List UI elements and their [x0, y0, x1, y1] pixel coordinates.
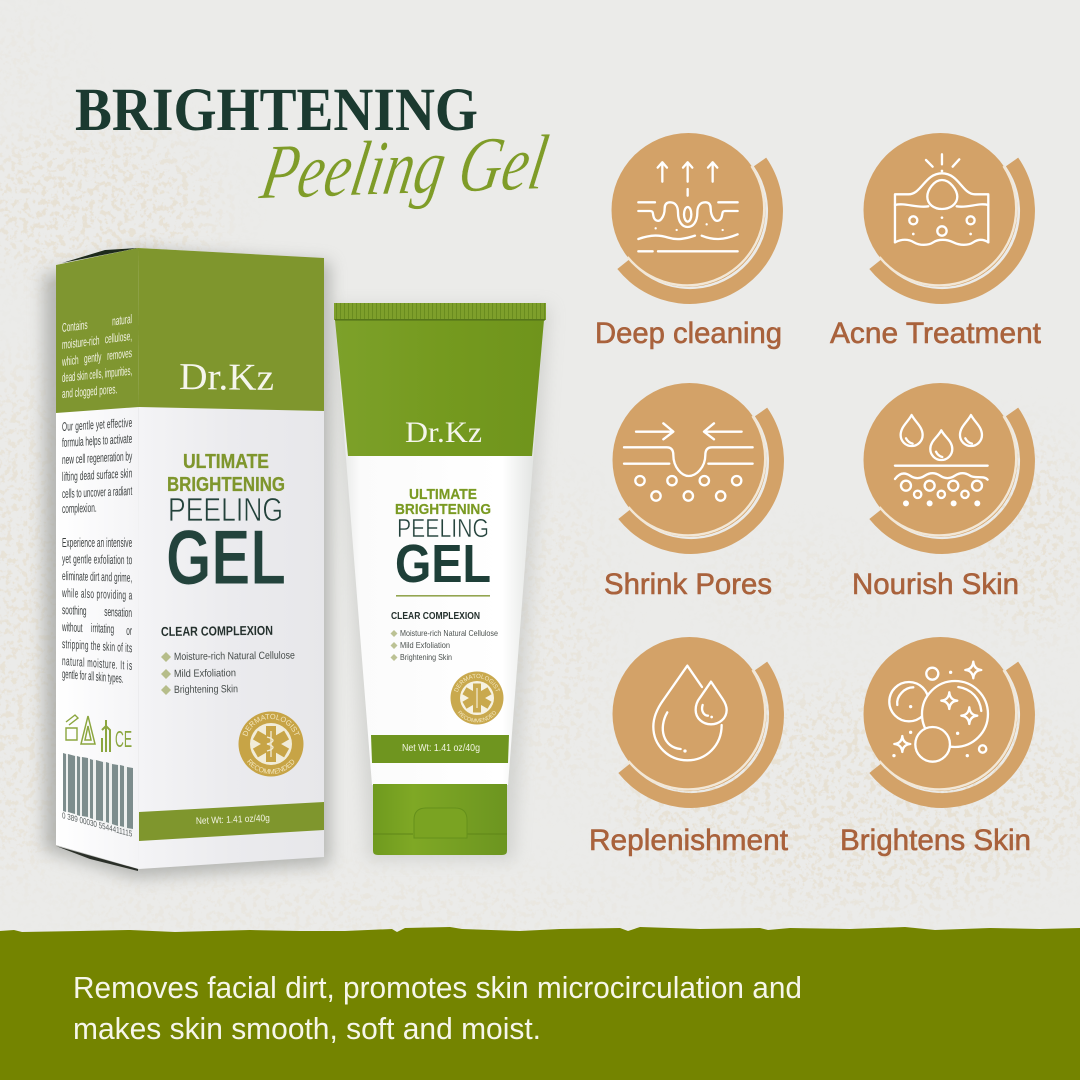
- headline: GEL: GEL: [166, 513, 286, 601]
- side text: paragraph 2: lifting dead surface skin: [62, 467, 132, 485]
- icon: pore with upward arrows: [638, 162, 738, 251]
- dermatologist badge on tube: RECOMMENDED: [458, 710, 496, 722]
- badge disc: [864, 383, 1035, 554]
- product tube: [334, 303, 552, 863]
- benefit: Acne Treatment: [830, 133, 1042, 350]
- tube claim list: Mild Exfoliation: [400, 640, 450, 650]
- background mottled texture: [0, 119, 1080, 924]
- box front face: [138, 248, 324, 869]
- box top edge: [62, 248, 138, 263]
- tube claim heading: CLEAR COMPLEXION: [391, 610, 480, 622]
- badge disc: [612, 637, 784, 808]
- side text: paragraph 3: natural moisture. It is: [62, 655, 132, 674]
- tube headline: GEL: GEL: [395, 534, 491, 594]
- footer description: makes skin smooth, soft and moist.: [73, 1011, 541, 1046]
- footer description: [73, 970, 802, 1046]
- icon: drops on skin: [895, 415, 988, 506]
- side text: paragraph 3: without: [61, 621, 83, 636]
- tube crimped seal: [334, 303, 546, 320]
- tube net weight band: [371, 735, 509, 763]
- side text: paragraph 2: cells to uncover a radiant: [62, 485, 132, 502]
- barcode: [62, 753, 133, 839]
- icon: person and bin: [102, 720, 110, 752]
- label: Replenishment: [589, 824, 789, 857]
- benefit: Deep cleaning: [595, 133, 783, 350]
- torn green band: [0, 927, 1080, 1080]
- headline: BRIGHTENING: BRIGHTENING: [167, 473, 285, 496]
- box net weight band: Net Wt: 1.41 oz/40g: [196, 813, 270, 827]
- tube net weight band: Net Wt: 1.41 oz/40g: [402, 743, 480, 754]
- headline: ULTIMATE: ULTIMATE: [183, 450, 269, 473]
- dermatologist badge on box: DERMATOLOGIST: [242, 714, 300, 736]
- claim diamonds: [161, 652, 171, 695]
- label: Nourish Skin: [852, 568, 1019, 601]
- footer band: [0, 927, 1080, 1080]
- dermatologist badge on box: RECOMMENDED: [247, 759, 294, 774]
- benefit: Replenishment: [589, 637, 789, 857]
- side text: paragraph 1: natural: [112, 313, 132, 329]
- label: Deep cleaning: [595, 317, 782, 350]
- tube claim list: Brightening Skin: [400, 652, 452, 662]
- side text: paragraph 2: formula helps to activate: [62, 433, 132, 451]
- box side face: [56, 248, 139, 869]
- tube claim diamonds: [390, 630, 398, 661]
- tube shadow: [334, 306, 550, 860]
- box net weight band: [139, 802, 324, 841]
- side text: paragraph 1: moisture-rich: [62, 334, 100, 353]
- footer description: Removes facial dirt, promotes skin microcirculation and: [73, 970, 802, 1005]
- side text: paragraph 2: new cell regeneration by: [62, 450, 132, 468]
- side text: paragraph 2: [62, 417, 132, 517]
- side text: paragraph 1: dead skin cells, impurities,: [62, 365, 132, 386]
- tube brand: Dr.Kz: Dr.Kz: [405, 416, 482, 449]
- icon: open jar: [66, 715, 78, 740]
- side text: paragraph 3: [61, 537, 132, 687]
- side text: paragraph 1: which: [61, 354, 79, 370]
- dermatologist badge on tube: [450, 672, 504, 724]
- icon: pore with inward arrows: [624, 423, 753, 501]
- dermatologist badge on tube: DERMATOLOGIST: [454, 674, 500, 692]
- box brand: Dr.Kz: Dr.Kz: [179, 356, 274, 399]
- side text: paragraph 3: stripping the skin of its: [62, 638, 132, 656]
- side text: paragraph 2: complexion.: [62, 502, 97, 517]
- tube headline: PEELING: PEELING: [397, 513, 489, 543]
- cap flip tab: [414, 808, 467, 838]
- title script: Peeling Gel: Peeling Gel: [254, 120, 554, 216]
- side text: paragraph 3: sensation: [104, 606, 132, 621]
- product box: [36, 242, 338, 885]
- side text: paragraph 1: gently: [84, 351, 101, 367]
- icon: recycling and CE symbols: [66, 715, 132, 752]
- side text: paragraph 3: while also providing a: [61, 587, 132, 603]
- badge disc: [612, 133, 783, 304]
- box headline: [166, 450, 286, 601]
- headline: PEELING: PEELING: [168, 491, 283, 528]
- side text: paragraph 1: cellulose,: [105, 330, 132, 347]
- benefit: Shrink Pores: [604, 383, 784, 601]
- tube claim list: [400, 628, 498, 662]
- tube headline: BRIGHTENING: BRIGHTENING: [395, 502, 491, 518]
- claim heading: CLEAR COMPLEXION: [161, 623, 273, 639]
- barcode digits: 0 389 00030 5544411115: [62, 810, 132, 839]
- claim list: Moisture-rich Natural Cellulose: [174, 650, 295, 663]
- box green panels: [56, 248, 324, 413]
- badge disc: [864, 133, 1035, 304]
- badge disc: [612, 383, 784, 554]
- label: Brightens Skin: [840, 824, 1031, 857]
- box bottom edge shadow: [56, 846, 138, 871]
- side text: paragraph 3: or: [126, 625, 132, 639]
- tube green upper: [335, 320, 544, 456]
- icon: CE mark: CE: [115, 726, 132, 752]
- dermatologist badge on box: [238, 712, 304, 776]
- icon: recycle triangle: [81, 716, 95, 744]
- tube headline: [395, 487, 491, 594]
- box claims: [161, 623, 295, 696]
- badge disc: [864, 637, 1035, 808]
- tube claim list: Moisture-rich Natural Cellulose: [400, 628, 498, 638]
- icon: water droplets: [653, 666, 727, 760]
- side text: paragraph 1: and clogged pores.: [62, 383, 117, 402]
- side text: paragraph 3: eliminate dirt and grime,: [62, 570, 132, 586]
- side text: paragraph 1: [61, 313, 132, 402]
- side text: paragraph 3: gentle for all skin types.: [62, 668, 123, 687]
- side text: paragraph 2: Our gentle yet effective: [62, 417, 132, 435]
- icon: sparkling bubbles: [889, 662, 988, 762]
- icon: skin with pimple: [895, 154, 988, 245]
- benefit: Nourish Skin: [852, 383, 1035, 601]
- label: Acne Treatment: [830, 317, 1042, 350]
- title: [75, 77, 554, 216]
- tube seal shadow: [335, 319, 545, 321]
- claim list: Mild Exfoliation: [174, 667, 236, 680]
- cap seam line: [373, 833, 507, 835]
- claim list: [174, 650, 295, 696]
- side text: paragraph 3: yet gentle exfoliation to: [62, 553, 132, 568]
- side text: paragraph 1: removes: [107, 347, 132, 364]
- box side copy: [61, 313, 132, 687]
- benefit: Brightens Skin: [840, 637, 1035, 857]
- side text: paragraph 1: Contains: [62, 319, 88, 336]
- tube claims: [390, 610, 498, 662]
- tube headline: ULTIMATE: ULTIMATE: [409, 487, 477, 503]
- label: Shrink Pores: [604, 568, 772, 601]
- claim list: Brightening Skin: [174, 683, 238, 696]
- tube cap: [373, 784, 507, 855]
- box shadow: [44, 250, 330, 878]
- title line: BRIGHTENING: BRIGHTENING: [75, 77, 478, 144]
- side text: paragraph 3: irritating: [91, 622, 114, 637]
- tube white body: [335, 320, 544, 785]
- side text: paragraph 3: soothing: [62, 604, 87, 619]
- tube divider: [396, 595, 490, 597]
- side text: paragraph 3: Experience an intensive: [62, 537, 132, 551]
